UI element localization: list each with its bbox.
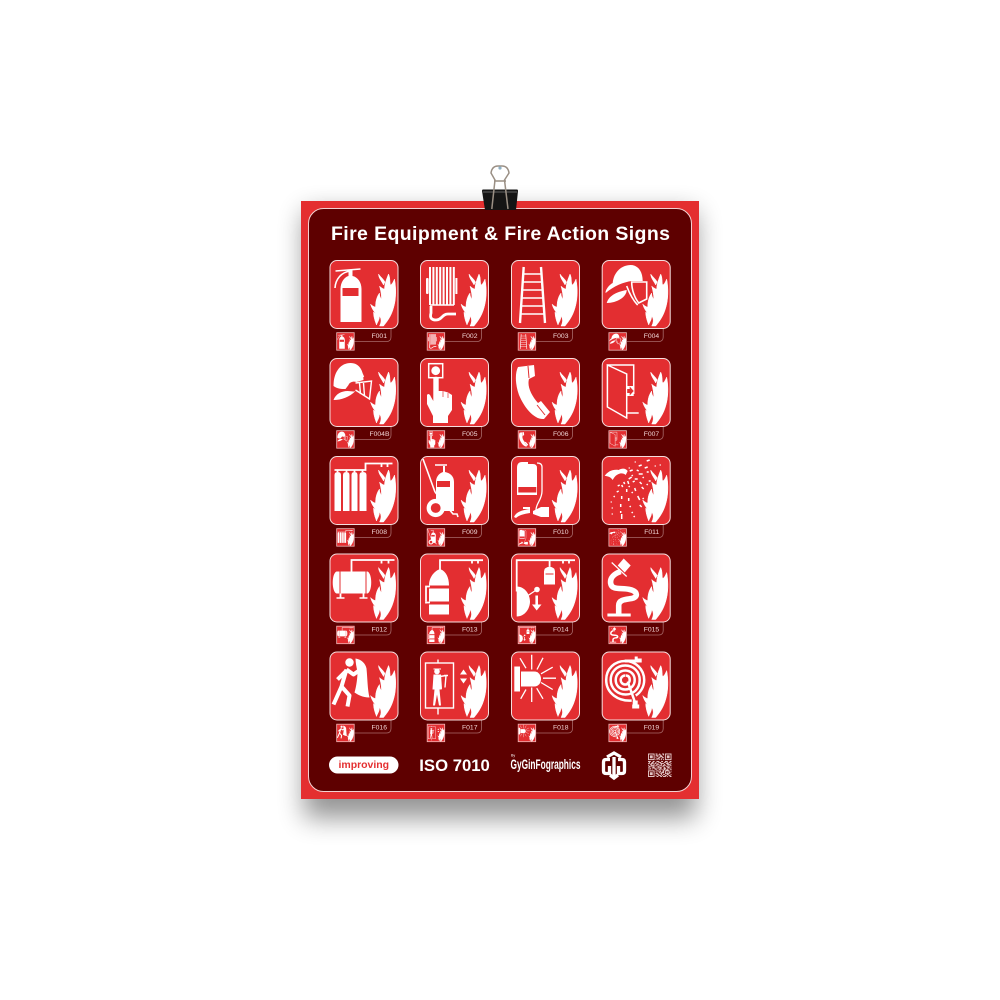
sign F013 (420, 554, 488, 644)
main sign: fire hose reel (420, 260, 488, 328)
mini sign F011 (609, 529, 626, 546)
code label F010: F010 (553, 529, 569, 536)
code label F008: F008 (372, 529, 387, 536)
mini sign F006 (518, 431, 536, 448)
main sign: fire extinguisher (330, 260, 398, 328)
main sign: hanging suppression unit (512, 554, 580, 622)
sign F006 (512, 358, 580, 448)
improving badge: improving (338, 759, 389, 771)
main sign: closed firefighter helmet (330, 358, 398, 426)
mini sign F002 (427, 333, 445, 350)
sign F017 (420, 652, 488, 742)
mini sign F014 (518, 626, 536, 644)
GyGinFographics wordmark (510, 754, 580, 772)
code label F014: F014 (553, 626, 569, 634)
code label F004: F004 (644, 333, 659, 340)
main sign: monitor hose (602, 554, 670, 622)
sign F019 (602, 652, 670, 742)
code label F012: F012 (372, 626, 387, 634)
mini sign F018 (518, 724, 536, 742)
mini sign F016 (337, 724, 354, 742)
sign F002 (420, 260, 488, 350)
mini sign F004B (337, 431, 354, 448)
mini sign F019 (609, 724, 626, 742)
main sign: horizontal tank with pipe (330, 554, 398, 622)
main sign: ladder (512, 260, 580, 328)
code label F005: F005 (462, 431, 478, 438)
sign F001 (330, 260, 398, 350)
sign F004B (330, 358, 398, 448)
title: Fire Equipment & Fire Action Signs (331, 223, 670, 245)
code label F004B: F004B (369, 431, 390, 438)
sign F011 (602, 456, 670, 546)
code label F002: F002 (462, 333, 478, 340)
improving badge (329, 756, 398, 774)
sign F018 (512, 652, 580, 742)
main sign: person with fire blanket (330, 652, 398, 720)
mini sign F012 (337, 626, 354, 644)
QR code (648, 754, 672, 777)
mini sign F004 (609, 333, 626, 350)
main sign: firefighter helmet (602, 260, 670, 328)
mini sign F013 (427, 626, 445, 644)
mini sign F005 (427, 431, 445, 448)
sign F015 (602, 554, 670, 644)
main sign: firefighter lift (420, 652, 488, 720)
main sign: wheeled extinguisher (420, 456, 488, 524)
code label F009: F009 (462, 529, 478, 536)
sign F008 (330, 456, 398, 546)
ISO 7010 standard label: ISO 7010 (419, 756, 490, 775)
GyGinFographics wordmark: By (511, 754, 515, 758)
mini sign F008 (337, 529, 354, 546)
code label F018: F018 (553, 724, 569, 732)
code label F006: F006 (553, 431, 569, 438)
sign F009 (420, 456, 488, 546)
mini sign F007 (609, 431, 626, 448)
code label F017: F017 (462, 724, 478, 732)
code label F011: F011 (644, 529, 659, 536)
code label F015: F015 (644, 626, 659, 634)
main sign: upright tank with pipe (420, 554, 488, 622)
main sign: sprinkler spray (602, 456, 670, 524)
sign F012 (330, 554, 398, 644)
panel: dark background (308, 208, 692, 792)
main sign: manual call point (420, 358, 488, 426)
mini sign F015 (609, 626, 626, 644)
main sign: coiled hose (602, 652, 670, 720)
code label F001: F001 (372, 333, 387, 340)
mini sign F017 (427, 724, 445, 742)
sign F014 (512, 554, 580, 644)
code label F013: F013 (462, 626, 478, 634)
code label F003: F003 (553, 333, 569, 340)
sign F003 (512, 260, 580, 350)
main sign: emergency telephone (512, 358, 580, 426)
main sign: flashing beacon (512, 652, 580, 720)
sign F007 (602, 358, 670, 448)
sign F016 (330, 652, 398, 742)
mini sign F010 (518, 529, 536, 546)
sign F010 (512, 456, 580, 546)
logo mark (604, 753, 624, 778)
code label F007: F007 (644, 431, 659, 438)
binder clip (482, 166, 518, 210)
poster (301, 201, 699, 799)
main sign: foam tank and nozzle (512, 456, 580, 524)
sign F005 (420, 358, 488, 448)
code label F016: F016 (372, 724, 387, 732)
mini sign F001 (337, 333, 354, 350)
code label F019: F019 (644, 724, 659, 732)
GyGinFographics wordmark: GyGinFographics (510, 757, 580, 772)
sign F004 (602, 260, 670, 350)
main sign: fire door (602, 358, 670, 426)
mini sign F003 (518, 333, 536, 350)
mini sign F009 (427, 529, 445, 546)
main sign: gas battery cylinders (330, 456, 398, 524)
poster drop shadow (304, 212, 696, 818)
